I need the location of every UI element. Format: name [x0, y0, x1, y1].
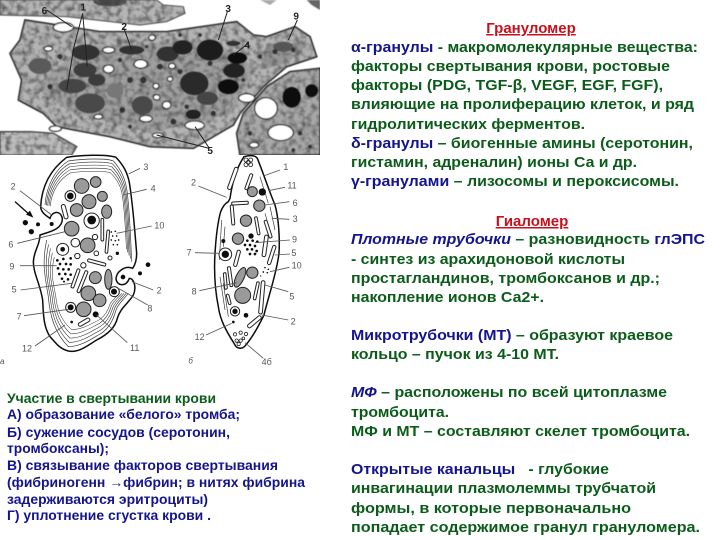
part numbers: 10: [154, 221, 164, 231]
part numbers: 7: [187, 248, 192, 258]
part numbers: 5: [289, 291, 294, 301]
part numbers: 11: [130, 343, 139, 353]
list items: задерживаются эритроциты): [7, 492, 208, 507]
delta granules text: гистамин, адреналин) ионы Са и др.: [351, 154, 637, 171]
heading: granulomere: Грануломер: [486, 20, 576, 37]
microtubule hatching: [219, 177, 275, 317]
micrograph: platelet electron microscopy: [0, 0, 320, 157]
open canaliculi text: [351, 461, 700, 536]
diagram b: platelet cross-section, narrow: [187, 156, 302, 367]
text panel: hyalomere: [351, 213, 705, 536]
glycogen: [244, 239, 269, 277]
microfilaments text: МФ – расположены по всей цитоплазме: [351, 384, 667, 401]
glycogen clusters: [56, 230, 119, 283]
text panel: granulomere: [351, 20, 698, 190]
microfilaments text: тромбоцита.: [351, 404, 449, 421]
dense tubules text: простагландинов, тромбоксанов и др.;: [351, 270, 660, 287]
microfilaments text: МФ и МТ – составляют скелет тромбоцита.: [351, 423, 690, 440]
dense granules: [28, 39, 318, 119]
list items: [7, 407, 306, 523]
list items: тромбоксаны);: [7, 441, 109, 456]
dense bodies: [219, 188, 266, 323]
heading: hyalomere: Гиаломер: [496, 213, 568, 230]
micrograph: platelet electron microscopy: 6: [42, 6, 48, 17]
dense tubules text: [351, 231, 705, 306]
vesicles and tubules: [61, 204, 112, 327]
lower microtubule rings: [44, 240, 128, 347]
part numbers: 5: [291, 248, 296, 258]
micrograph: platelet electron microscopy: 9: [293, 11, 299, 22]
list items: (фибриногенн →фибрин; в нитях фибрина: [7, 475, 306, 490]
delta granules text: [351, 135, 693, 171]
dense bodies: [23, 191, 150, 323]
label lines: [17, 168, 153, 346]
open canaliculi text: попадает содержимое гранул грануломера.: [351, 519, 700, 536]
open canaliculi text: формы, в которые первоначально: [351, 500, 631, 517]
micrograph: platelet electron microscopy: 4: [244, 40, 250, 51]
micrograph: platelet electron microscopy: 2: [121, 22, 127, 33]
open canaliculi text: Открытые канальцы - глубокие: [351, 461, 609, 478]
granules: [64, 177, 107, 317]
adjacent cell lower right: [237, 68, 320, 155]
text block: role in blood coagulation: [7, 391, 306, 523]
micrograph: platelet electron microscopy: 3: [225, 4, 231, 15]
part numbers: 2: [11, 181, 16, 191]
cell membrane: [215, 156, 279, 348]
apical tubule clusters: [233, 158, 253, 346]
alpha granules text: гидролитических ферментов.: [351, 116, 585, 133]
micrograph pointer lines and numbers: [47, 10, 297, 148]
dense tubules text: - синтез из арахидоновой кислоты: [351, 251, 625, 268]
list items: Б) сужение сосудов (серотонин,: [7, 425, 230, 440]
alpha granules text: факторы (PDG, TGF-β, VEGF, EGF, FGF),: [351, 77, 663, 94]
part numbers: 12: [22, 344, 32, 354]
diagram a: platelet cross-section, wide: а: [0, 357, 5, 366]
delta granules text: δ-гранулы – биогенные амины (серотонин,: [351, 135, 693, 152]
vacuoles and canaliculi: [44, 23, 293, 148]
main cell body: [10, 20, 317, 148]
microfilaments text: [351, 384, 690, 440]
alpha granules text: [351, 39, 698, 133]
granules: [232, 187, 265, 303]
cytoplasm grain: [0, 0, 320, 155]
pointer arrow: [15, 202, 30, 215]
diagram b: platelet cross-section, narrow: б: [188, 356, 193, 365]
dense tubules text: Плотные трубочки – разновидность глЭПС: [351, 231, 705, 248]
part numbers: 8: [147, 303, 152, 313]
block heading: Участие в свертывании крови: [7, 391, 216, 406]
part numbers: 2: [291, 316, 296, 326]
part numbers: 2: [157, 285, 162, 295]
part numbers: 7: [17, 311, 22, 321]
alpha granules text: влияющие на пролиферацию клеток, и ряд: [351, 96, 695, 113]
list items: А) образование «белого» тромба;: [7, 407, 240, 422]
alpha granules text: факторы свертывания крови, ростовые: [351, 58, 670, 75]
cell membrane: [33, 155, 137, 351]
part numbers: 9: [292, 235, 297, 245]
neighbouring cells: [0, 0, 185, 25]
part numbers: 12: [195, 332, 205, 342]
cytoplasm speckle: [47, 33, 312, 152]
part numbers: 3: [293, 214, 298, 224]
part numbers: 1: [283, 162, 288, 172]
open canaliculi text: инвагинации плазмолеммы трубчатой: [351, 480, 656, 497]
diagram a: platelet cross-section, wide: [0, 155, 164, 366]
part numbers: 3: [143, 162, 148, 172]
part numbers: 2: [191, 178, 196, 188]
part numbers: 4б: [262, 357, 272, 367]
dense tubules text: накопление ионов Са2+.: [351, 289, 544, 306]
micrograph: platelet electron microscopy: 1: [80, 3, 86, 14]
tubules: [223, 167, 276, 329]
part numbers: 9: [9, 261, 14, 271]
part numbers: 6: [293, 198, 298, 208]
list items: В) связывание факторов свертывания: [7, 458, 278, 473]
label lines: [195, 170, 290, 358]
part numbers: 8: [192, 287, 197, 297]
microtubules text: [351, 327, 673, 363]
alpha granules text: α-гранулы - макромолекулярные вещества:: [351, 39, 698, 56]
part numbers: 6: [8, 239, 13, 249]
upper microtubule rings: [45, 159, 132, 262]
list items: Г) уплотнение сгустка крови .: [7, 508, 211, 523]
part numbers: 11: [287, 180, 297, 190]
part numbers: [8, 162, 164, 354]
gamma granules text: γ-гранулами – лизосомы и пероксисомы.: [351, 173, 679, 190]
part numbers: 4: [151, 184, 156, 194]
part numbers: 10: [292, 260, 302, 270]
part numbers: 5: [12, 285, 17, 295]
microtubules text: кольцо – пучок из 4-10 МТ.: [351, 346, 559, 363]
microtubules text: Микротрубочки (МТ) – образуют краевое: [351, 327, 673, 344]
micrograph: platelet electron microscopy: 5: [207, 146, 213, 157]
part numbers: [187, 162, 302, 367]
